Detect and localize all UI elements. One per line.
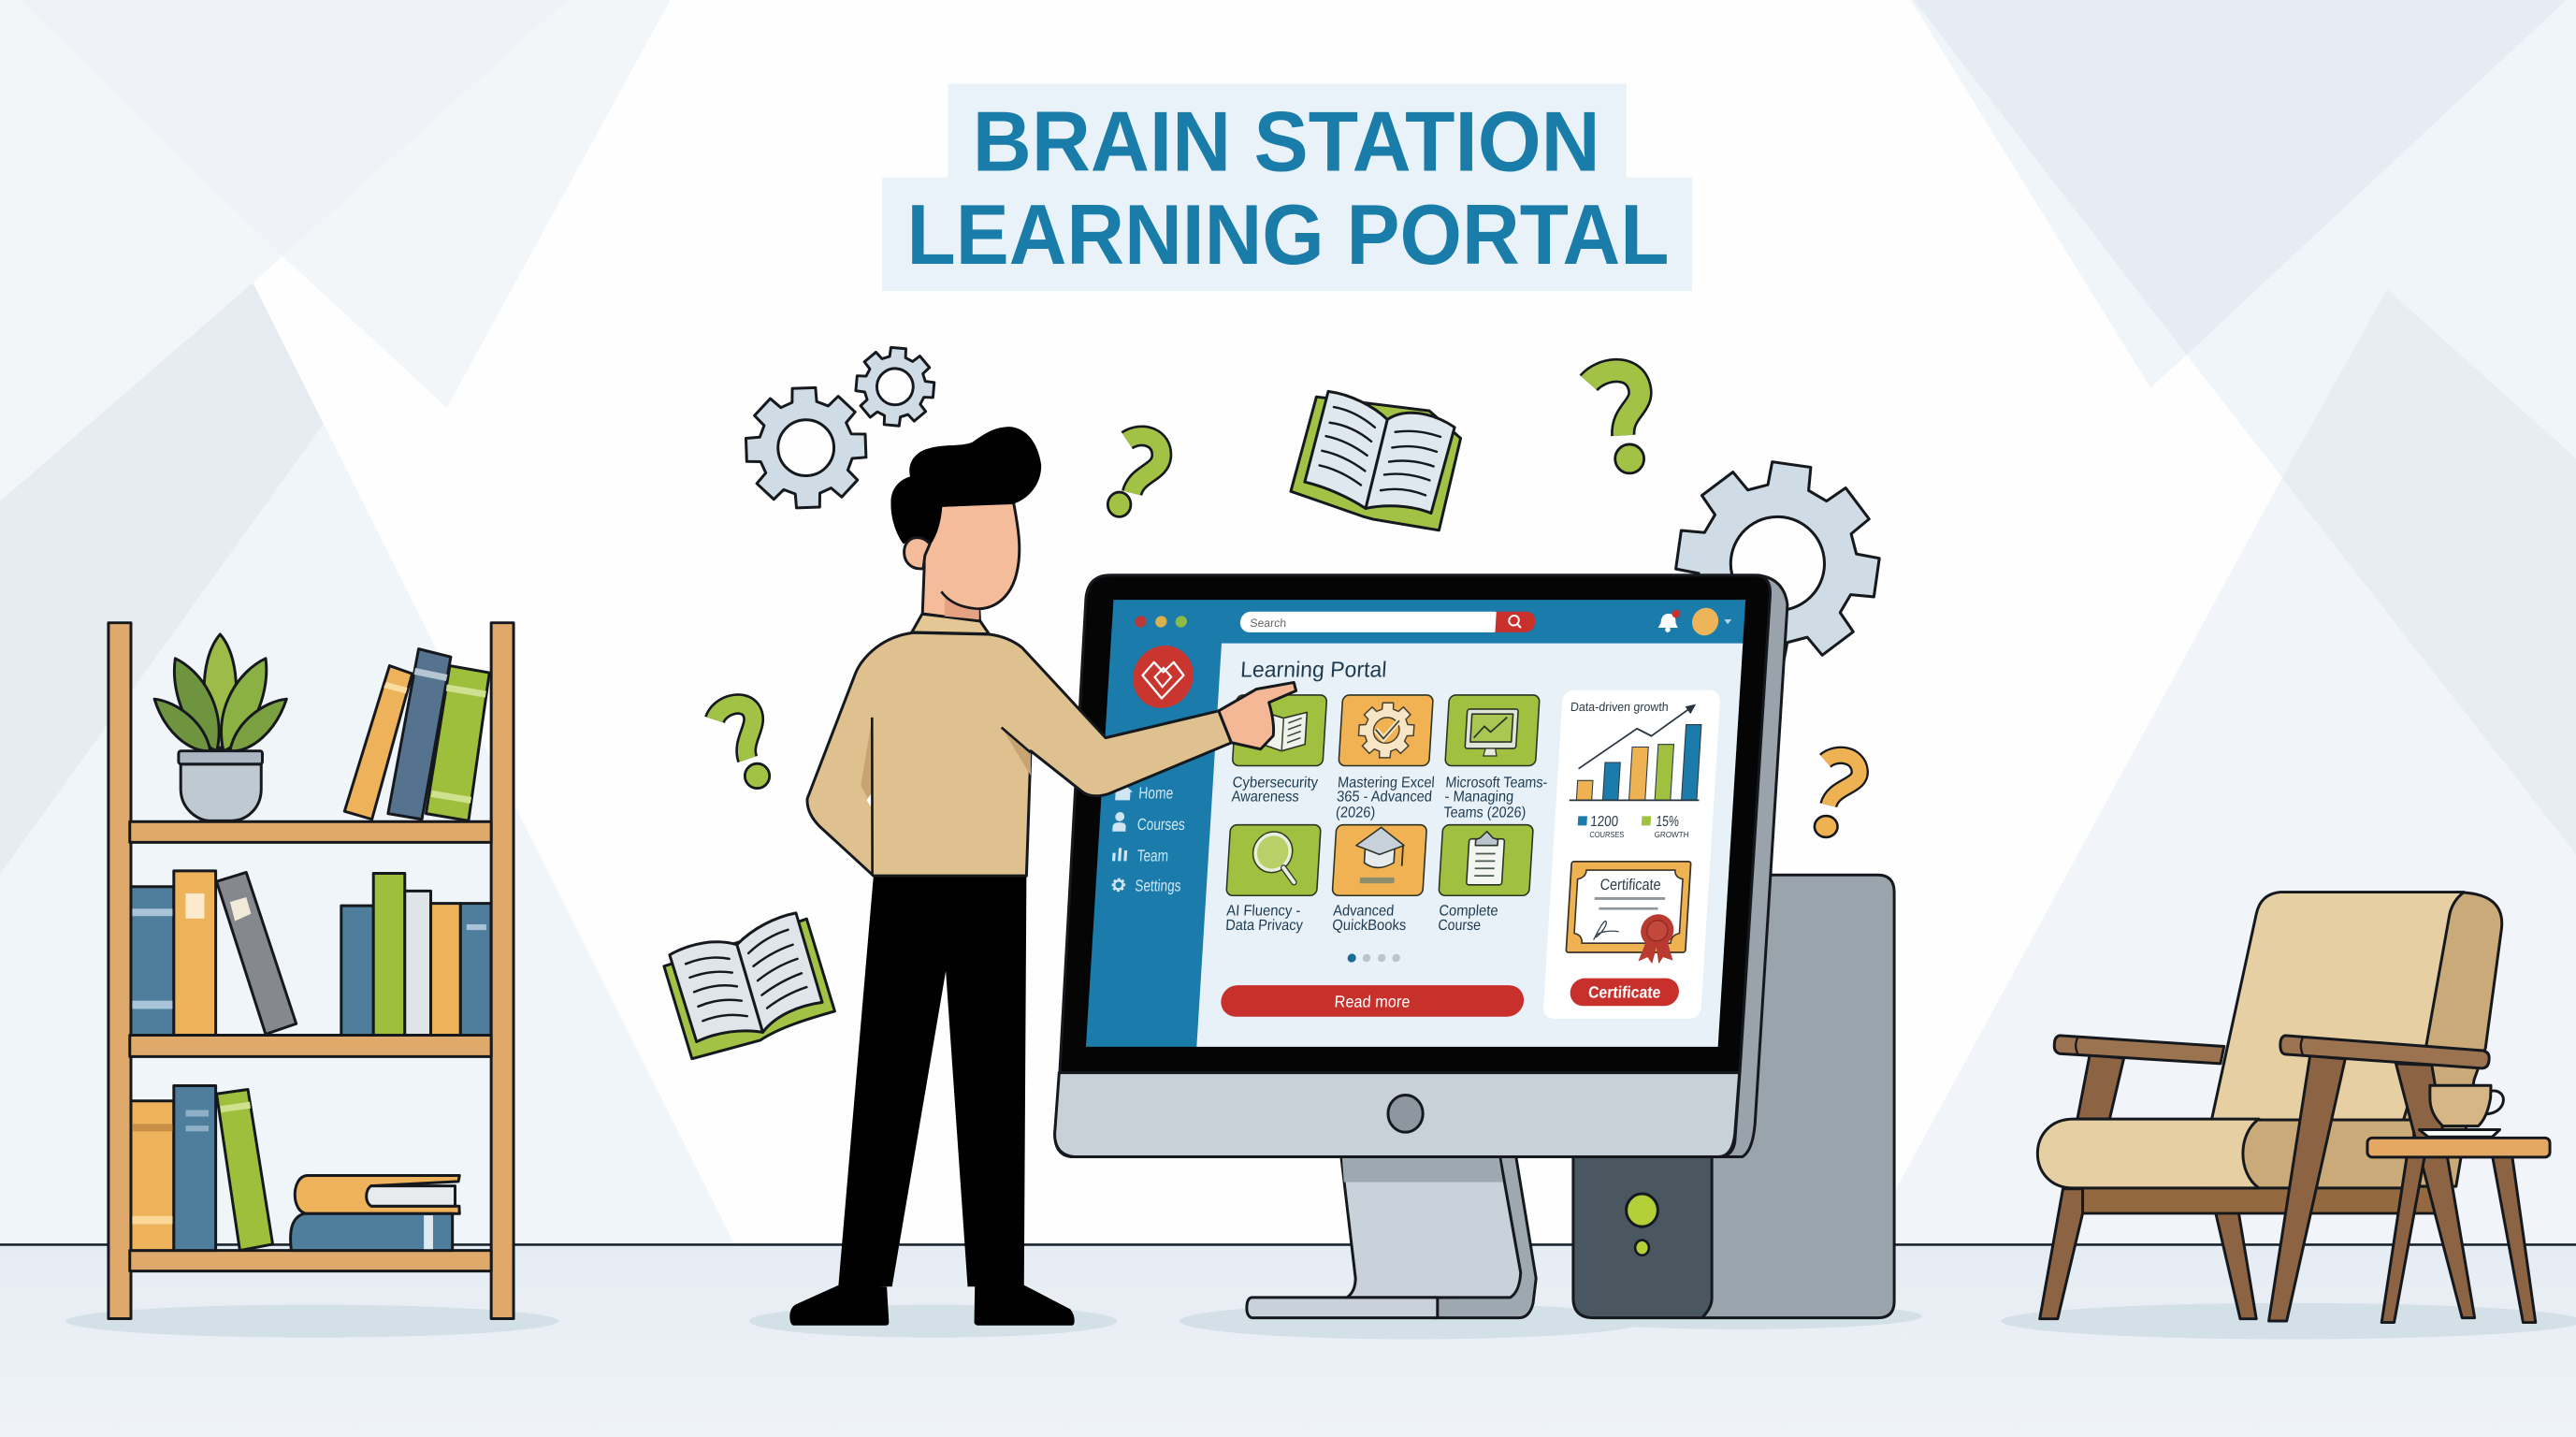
course tile: teams: Teams (2026)	[1443, 804, 1527, 820]
nav: courses: Courses	[1136, 815, 1186, 834]
course tile: complete course: Course	[1438, 917, 1482, 934]
question mark: top centre	[1107, 436, 1162, 516]
course tile: cybersecurity	[1230, 695, 1327, 806]
certificate: Certificate	[1599, 876, 1661, 893]
course tile: AI fluency	[1223, 825, 1321, 934]
side table	[2367, 1138, 2550, 1323]
title	[882, 84, 1692, 291]
course tile: cybersecurity: Cybersecurity	[1232, 774, 1319, 791]
stat legend: 15% growth: GROWTH	[1654, 830, 1689, 839]
shirt	[807, 632, 1231, 876]
search bar	[1239, 612, 1536, 632]
course tile: excel: Mastering Excel	[1338, 774, 1435, 791]
stat legend: 1200 courses: COURSES	[1589, 830, 1625, 839]
course tile: quickbooks	[1330, 825, 1426, 934]
hand pointing	[1219, 682, 1296, 749]
monitor back edge	[1709, 575, 1787, 1157]
course tile: AI fluency: Data Privacy	[1225, 917, 1304, 934]
collar	[912, 614, 989, 634]
shoes	[789, 1285, 1075, 1326]
sidebar navigation	[1107, 784, 1188, 895]
bar chart: data-driven growth	[1565, 700, 1705, 800]
content panel	[1196, 644, 1743, 1047]
middle shelf books	[131, 871, 491, 1036]
course tile: teams	[1441, 695, 1553, 820]
course tile: cybersecurity: Awareness	[1231, 789, 1299, 806]
gear: large left	[745, 386, 868, 510]
title: LEARNING PORTAL	[907, 187, 1669, 283]
front left leg	[2040, 1189, 2083, 1319]
heading: Learning Portal	[1239, 657, 1387, 681]
left armrest	[2054, 1036, 2224, 1064]
chair back front	[2211, 893, 2464, 1120]
logo	[1131, 646, 1195, 708]
button: read more: Read more	[1334, 993, 1411, 1011]
top shelf books	[344, 649, 489, 820]
button: read more	[1220, 985, 1525, 1017]
rear left leg	[2215, 1211, 2256, 1319]
course tile: teams: Microsoft Teams-	[1445, 774, 1548, 791]
title: BRAIN STATION	[973, 94, 1600, 190]
monitor bezel and chin	[1055, 575, 1771, 1157]
question mark: orange	[1815, 755, 1860, 837]
monitor button	[1388, 1095, 1423, 1132]
trousers	[838, 876, 1026, 1286]
screen: learning portal UI	[1086, 600, 1745, 1047]
nav: home: Home	[1138, 784, 1174, 803]
nav: team: Team	[1136, 846, 1169, 864]
bottom shelf books	[131, 1085, 459, 1251]
open book: top	[1291, 391, 1461, 530]
person	[789, 427, 1296, 1326]
question mark: left	[715, 704, 770, 789]
course tile: complete course: Complete	[1439, 902, 1498, 919]
stat legend: 15% growth	[1641, 814, 1690, 839]
monitor stand	[1247, 1157, 1536, 1318]
bookshelf	[109, 623, 514, 1319]
hair	[890, 427, 1041, 544]
course tile: teams: - Managing	[1444, 789, 1514, 806]
pager dots	[1347, 953, 1400, 963]
front right leg	[2269, 1055, 2345, 1321]
open book: lower left	[664, 913, 834, 1059]
chair back side	[2366, 893, 2502, 1186]
stat legend: 15% growth: 15%	[1656, 814, 1679, 830]
head and neck	[922, 502, 1020, 621]
ear	[904, 538, 930, 569]
right armrest	[2280, 1036, 2489, 1068]
course tile: excel: 365 - Advanced	[1337, 789, 1433, 806]
stat legend: 1200 courses	[1577, 814, 1626, 839]
course tile: quickbooks: QuickBooks	[1332, 917, 1407, 934]
icon: bell	[1657, 610, 1681, 632]
course tile: quickbooks: Advanced	[1333, 902, 1395, 919]
bar chart: data-driven growth: Data-driven growth	[1570, 700, 1669, 714]
question mark: top right	[1588, 370, 1644, 473]
gear: small left	[853, 344, 937, 428]
gear: behind monitor	[1665, 451, 1890, 676]
tower power lights	[1627, 1194, 1657, 1256]
stat legend: 1200 courses: 1200	[1590, 814, 1619, 830]
search bar: Search	[1250, 617, 1287, 630]
screen background and sidebar	[1086, 600, 1745, 1047]
window dots	[1135, 616, 1187, 628]
armchair	[2037, 893, 2502, 1321]
shelf frame	[109, 623, 514, 1319]
button: certificate	[1570, 979, 1680, 1006]
seat frame	[2072, 1186, 2436, 1213]
monitor	[1055, 575, 1787, 1157]
course tile: complete course	[1436, 825, 1533, 934]
course tile: AI fluency: AI Fluency -	[1226, 902, 1301, 919]
seat cushion	[2037, 1119, 2414, 1188]
rear right leg	[2396, 1064, 2475, 1318]
computer tower	[1573, 875, 1894, 1318]
nav: settings: Settings	[1135, 877, 1181, 895]
coffee cup	[2419, 1085, 2503, 1137]
avatar	[1691, 608, 1732, 635]
course tile: excel: (2026)	[1336, 804, 1376, 820]
plant	[154, 634, 286, 820]
side card	[1542, 690, 1721, 1019]
floor	[0, 1244, 2576, 1437]
floor shadows	[65, 1303, 2576, 1339]
course tile: excel	[1335, 695, 1440, 820]
certificate	[1565, 862, 1691, 964]
button: certificate: Certificate	[1588, 983, 1661, 1002]
left arm support	[2077, 1055, 2124, 1119]
